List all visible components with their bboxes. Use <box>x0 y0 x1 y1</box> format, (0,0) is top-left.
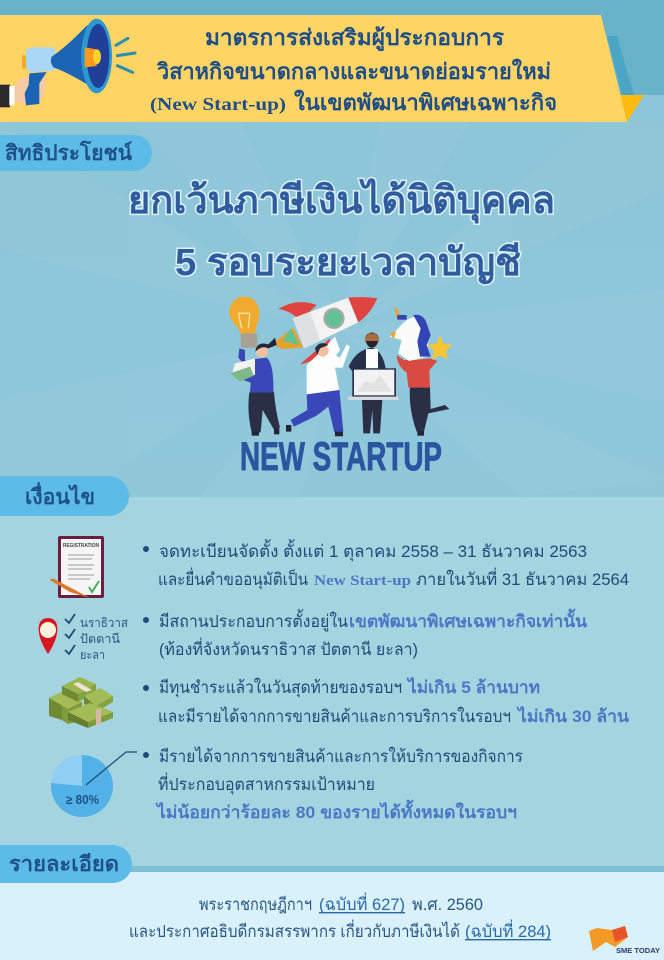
illustration: new startup team <box>229 297 452 436</box>
title <box>150 25 557 115</box>
icon: location pin with provinces: ปัตตานี <box>80 632 120 646</box>
bullet 2: location: เขตพัฒนาพิเศษเฉพาะกิจเท่านั้น <box>349 608 587 631</box>
bullet 3: capital and revenue: ไม่เกิน 5 ล้านบาท <box>406 677 540 697</box>
bullet 4: target industry revenue: ไม่น้อยกว่าร้อยละ 80 ของรายได้ทั้งหมดในรอบฯ <box>155 799 517 822</box>
figure: man with laptop <box>348 332 398 433</box>
bullet 3: capital and revenue: มีทุนชำระแล้วในวันสุดท้ายของรอบฯ <box>159 677 402 698</box>
pie chart: at least 80 percent <box>51 752 137 817</box>
main headline <box>128 178 555 284</box>
heading: benefits: สิทธิประโยชน์ <box>5 140 133 165</box>
bullet 4: target industry revenue: มีรายได้จากการขายสินค้าและการให้บริการของกิจการ <box>159 746 523 766</box>
bullet 3: capital and revenue <box>143 677 629 726</box>
bullet 1: registration: จดทะเบียนจัดตั้ง ตั้งแต่ 1 ตุลาคม 2558 – 31 ธันวาคม 2563 <box>159 539 587 562</box>
bullet 2: location <box>143 608 587 659</box>
title: มาตรการส่งเสริมผู้ประกอบการ <box>205 25 504 52</box>
title: วิสาหกิจขนาดกลางและขนาดย่อมรายใหม่ <box>156 58 551 84</box>
heading: benefits <box>0 135 152 171</box>
heading: details <box>0 845 132 883</box>
icon: megaphone <box>0 19 135 107</box>
heading: conditions <box>0 476 129 516</box>
figure: person in white holding rocket <box>286 337 350 436</box>
main headline: 5 รอบระยะเวลาบัญชี <box>175 242 521 284</box>
main headline: ยกเว้นภาษีเงินได้นิติบุคคล <box>128 178 555 224</box>
legal references: พ.ศ. 2560 <box>412 895 483 914</box>
bullet 2: location: (ท้องที่จังหวัดนราธิวาส ปัตตานี ยะลา) <box>159 637 418 659</box>
icon: location pin with provinces: ยะลา <box>80 648 105 662</box>
panel: details background <box>0 866 664 960</box>
bullet 4: target industry revenue <box>143 746 523 822</box>
legal references: พระราชกฤษฎีกาฯ <box>199 895 312 914</box>
bullet 4: target industry revenue: ที่ประกอบอุตสาหกรรมเป้าหมาย <box>158 772 375 795</box>
title: (New Start-up) <box>150 94 286 115</box>
logo: SME Today: SME TODAY <box>616 946 660 955</box>
wordmark: new startup: NEW STARTUP <box>240 435 442 479</box>
bullet 1: registration <box>143 539 629 590</box>
title: ในเขตพัฒนาพิเศษเฉพาะกิจ <box>294 89 557 115</box>
icon: rocket <box>274 297 377 364</box>
icon: location pin with provinces <box>39 614 128 662</box>
icon: registration document <box>50 536 104 598</box>
bullet 1: registration: New Start-up <box>314 573 411 589</box>
legal references <box>129 892 551 941</box>
bullet 1: registration: และยื่นคำขออนุมัติเป็น <box>158 567 308 590</box>
icon: location pin with provinces: นราธิวาส <box>80 616 128 630</box>
legal references: (ฉบับที่ 284) <box>465 919 551 941</box>
figure: woman with books <box>230 338 280 436</box>
icon: light bulb <box>229 297 259 348</box>
header banner <box>0 15 644 122</box>
bullet 3: capital and revenue: และมีรายได้จากการขายสินค้าและการบริการในรอบฯ <box>158 706 511 726</box>
icon: registration document: REGISTRATION <box>63 543 99 549</box>
pie chart: at least 80 percent: ≥ 80% <box>66 793 99 807</box>
legal references: (ฉบับที่ 627) <box>319 892 405 914</box>
legal references: และประกาศอธิบดีกรมสรรพากร เกี่ยวกับภาษีเงินได้ <box>129 919 460 941</box>
bullet 1: registration: ภายในวันที่ 31 ธันวาคม 2564 <box>416 567 629 589</box>
bullet 2: location: มีสถานประกอบการตั้งอยู่ใน <box>159 609 348 632</box>
icon: stacks of money <box>49 677 113 728</box>
logo: SME Today <box>589 926 660 955</box>
heading: conditions: เงื่อนไข <box>25 481 95 509</box>
figure: unicorn mascot with star <box>390 306 452 436</box>
panel: conditions background <box>0 497 664 868</box>
heading: details: รายละเอียด <box>9 852 119 876</box>
bullet 3: capital and revenue: ไม่เกิน 30 ล้าน <box>516 706 629 726</box>
